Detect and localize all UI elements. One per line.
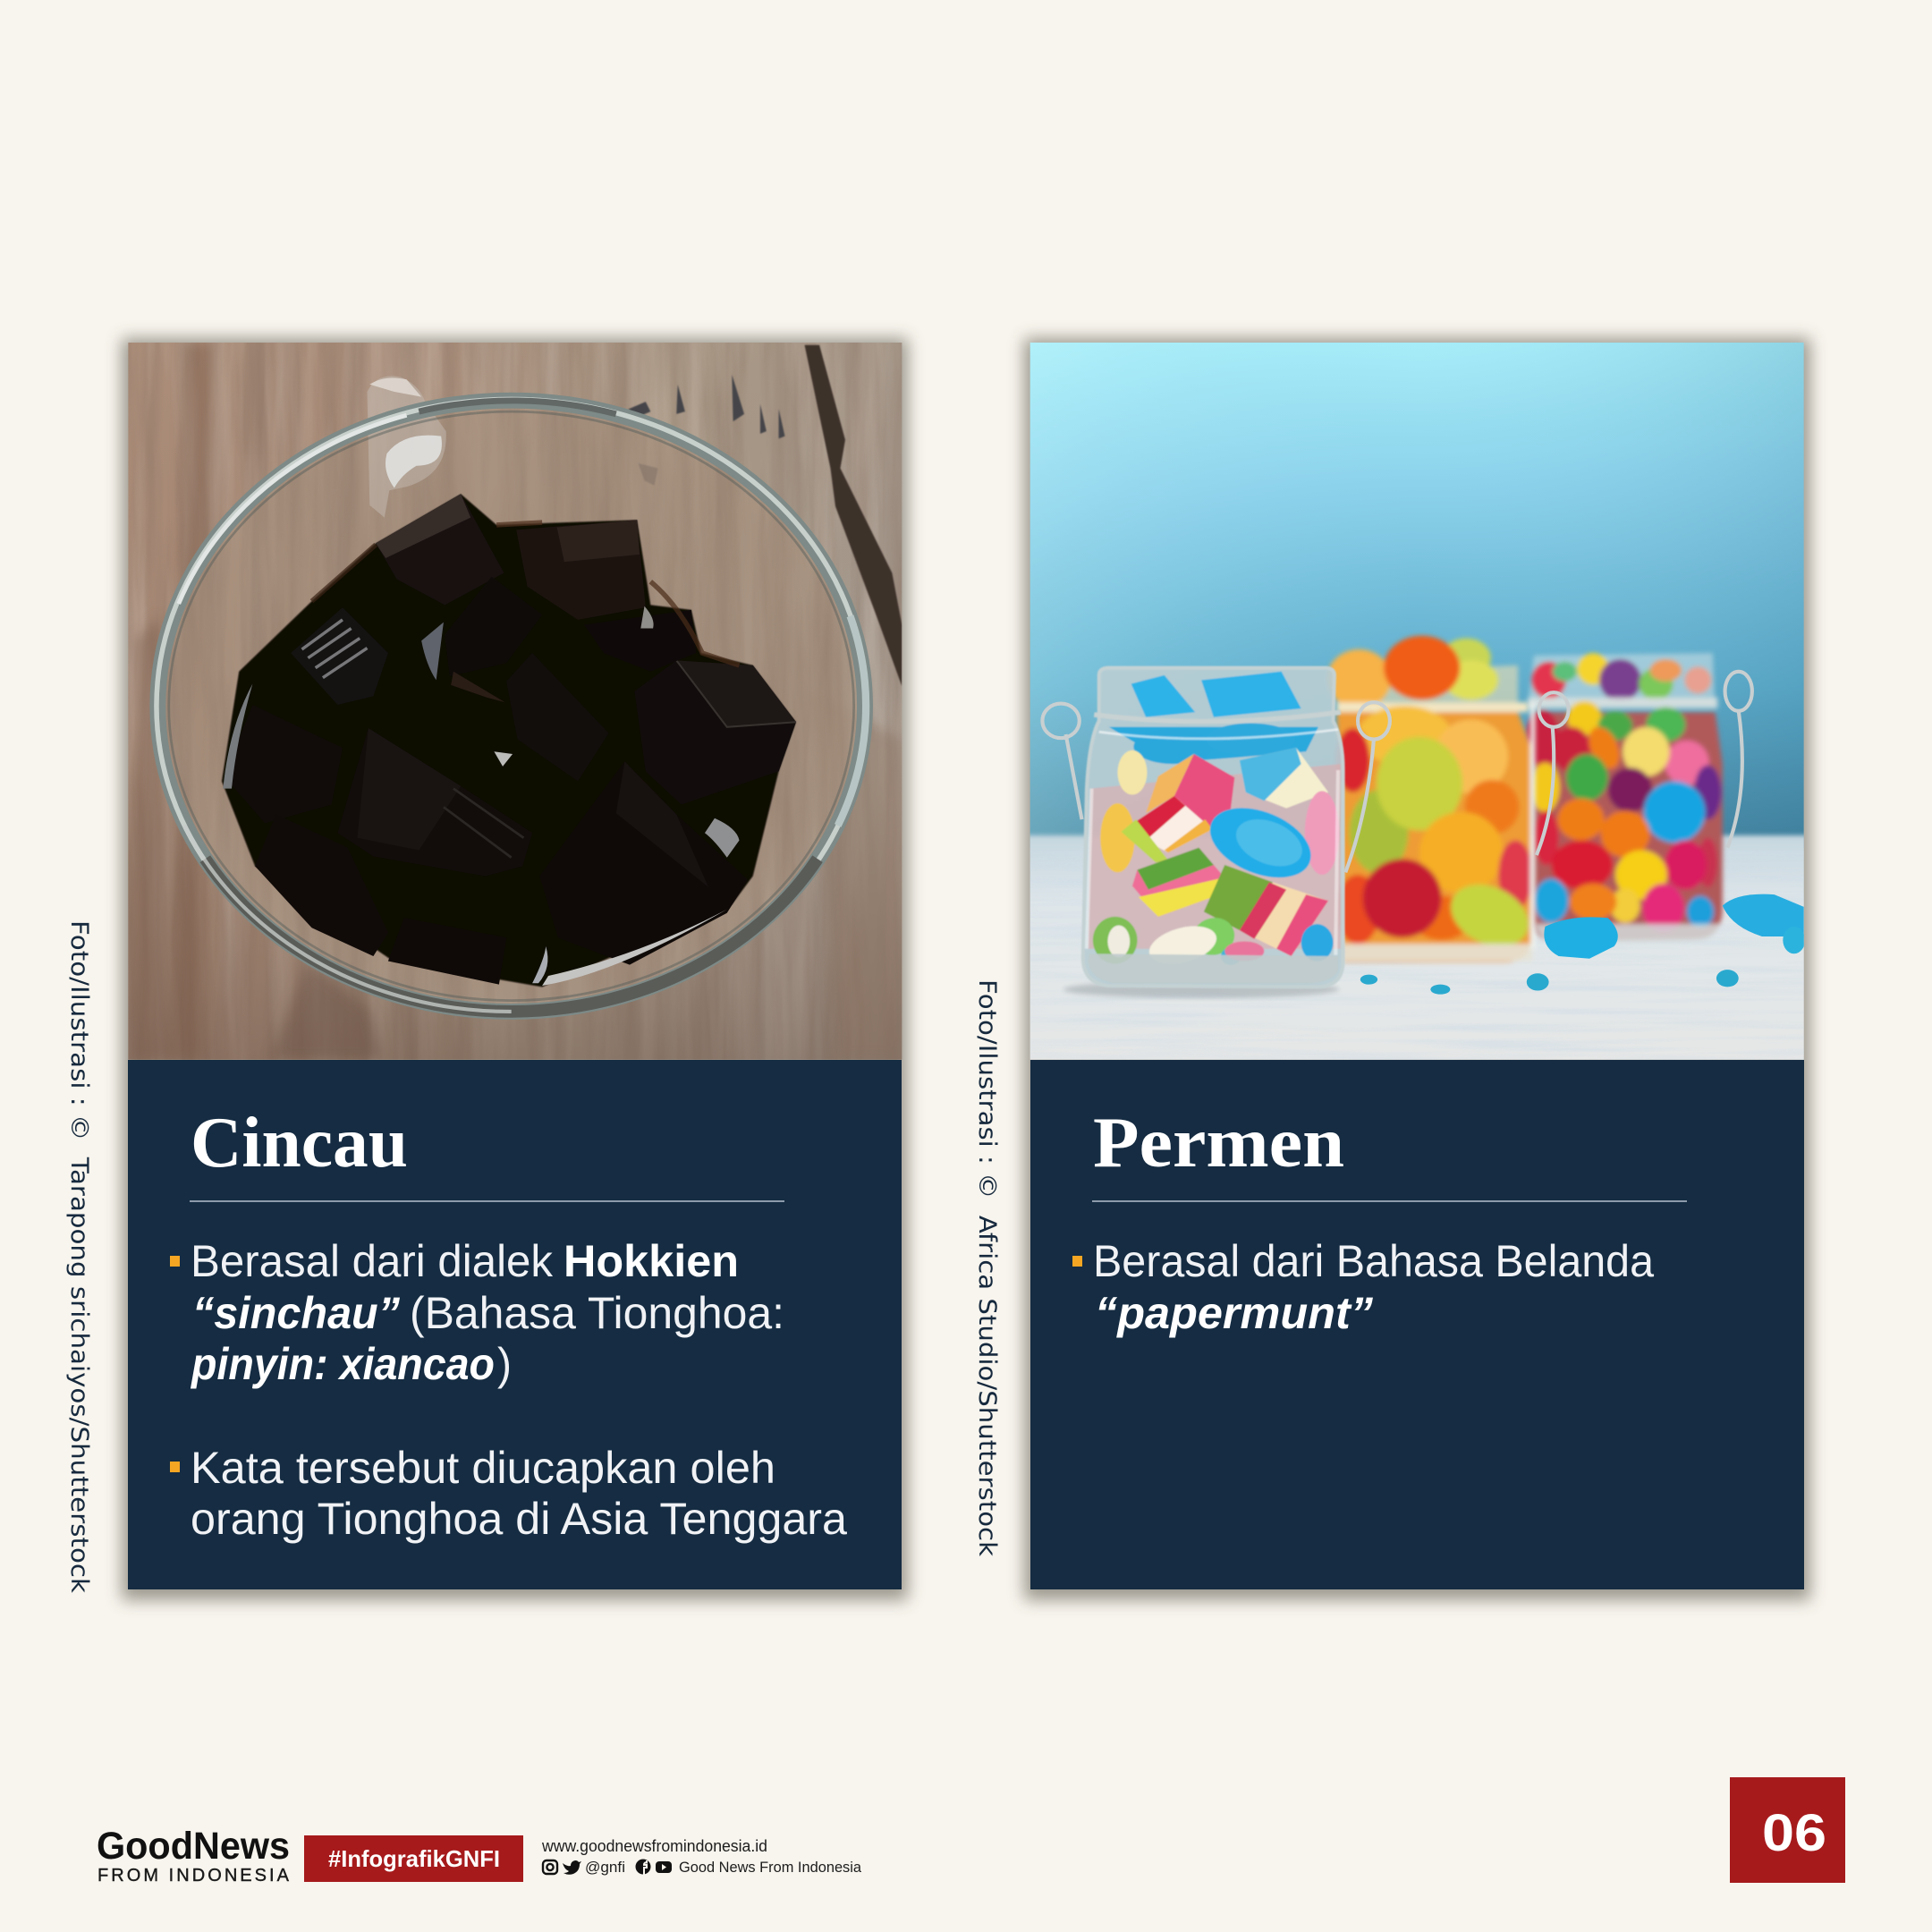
bullet xyxy=(1072,1236,1654,1338)
icon: twitter xyxy=(563,1860,581,1875)
text lines xyxy=(1093,1236,1654,1338)
heading: Cincau: Cincau xyxy=(191,1104,408,1182)
panel: permen xyxy=(1022,338,1811,1600)
logo: GoodNews From Indonesia: FROM INDONESIA xyxy=(97,1866,290,1885)
text lines: “papermunt” xyxy=(1095,1288,1373,1338)
credit: permen photo: Foto/Ilustrasi : © Africa Studio/Shutterstock xyxy=(973,979,1001,1556)
text lines: Berasal dari Bahasa Belanda xyxy=(1093,1236,1654,1286)
credit: cincau photo: Foto/Ilustrasi : © Tarapong srichaiyos/Shutterstock xyxy=(65,920,93,1593)
jar shadow on table xyxy=(1063,981,1339,998)
divider xyxy=(190,1200,784,1202)
bullet 2 xyxy=(170,1443,847,1544)
jar 2: hard candies xyxy=(1327,636,1538,962)
panel shadow xyxy=(122,338,908,1600)
text lines: pinyin: xiancao xyxy=(190,1339,495,1389)
navy background xyxy=(128,1060,902,1589)
text lines xyxy=(190,1236,784,1389)
text lines: orang Tionghoa di Asia Tenggara xyxy=(191,1494,847,1544)
heading: Permen: Permen xyxy=(1093,1104,1344,1182)
photo: grass jelly in a glass bowl xyxy=(128,343,902,1060)
handle: @gnfi xyxy=(585,1859,625,1876)
wood crack and knots xyxy=(629,345,902,686)
jar 3: coloured candies xyxy=(1525,653,1723,944)
icon: facebook xyxy=(635,1859,651,1875)
photo: candy jars xyxy=(1022,343,1811,1070)
glass bowl xyxy=(157,376,866,1013)
navy background xyxy=(1030,1060,1804,1589)
panel shadow xyxy=(1024,338,1810,1600)
marker xyxy=(170,1256,180,1267)
website: www.goodnewsfromindonesia.id xyxy=(541,1837,767,1855)
page number badge: 06 xyxy=(1762,1804,1826,1862)
text lines xyxy=(191,1443,847,1544)
text panel: permen xyxy=(1030,1060,1804,1589)
hashtag badge: #InfografikGNFI xyxy=(328,1845,500,1872)
bullet 1 xyxy=(170,1236,784,1389)
bowl rim xyxy=(157,399,866,1013)
marker xyxy=(170,1462,180,1472)
jelly cubes xyxy=(222,494,796,987)
marker xyxy=(1072,1256,1082,1267)
text lines: Berasal dari dialek xyxy=(191,1236,554,1286)
loose candies xyxy=(1360,894,1805,995)
text lines: ) xyxy=(497,1339,512,1389)
wire handles xyxy=(1042,672,1752,872)
text lines: Kata tersebut diucapkan oleh xyxy=(191,1443,775,1493)
social name: Good News From Indonesia xyxy=(679,1859,862,1876)
text panel: cincau xyxy=(128,1060,902,1589)
panel: cincau xyxy=(122,338,908,1600)
page number badge xyxy=(1730,1777,1845,1883)
logo: GoodNews From Indonesia: GoodNews xyxy=(97,1825,290,1868)
icon: instagram xyxy=(543,1860,557,1874)
text lines: Hokkien xyxy=(564,1236,739,1286)
jar 1: sour candies xyxy=(1083,668,1343,987)
text lines: (Bahasa Tionghoa: xyxy=(410,1288,784,1338)
icon: youtube xyxy=(656,1861,672,1873)
divider xyxy=(1092,1200,1687,1202)
text lines: “sinchau” xyxy=(192,1288,400,1338)
hashtag badge xyxy=(304,1835,523,1882)
logo: GoodNews From Indonesia xyxy=(97,1825,290,1885)
footer xyxy=(97,1825,862,1885)
